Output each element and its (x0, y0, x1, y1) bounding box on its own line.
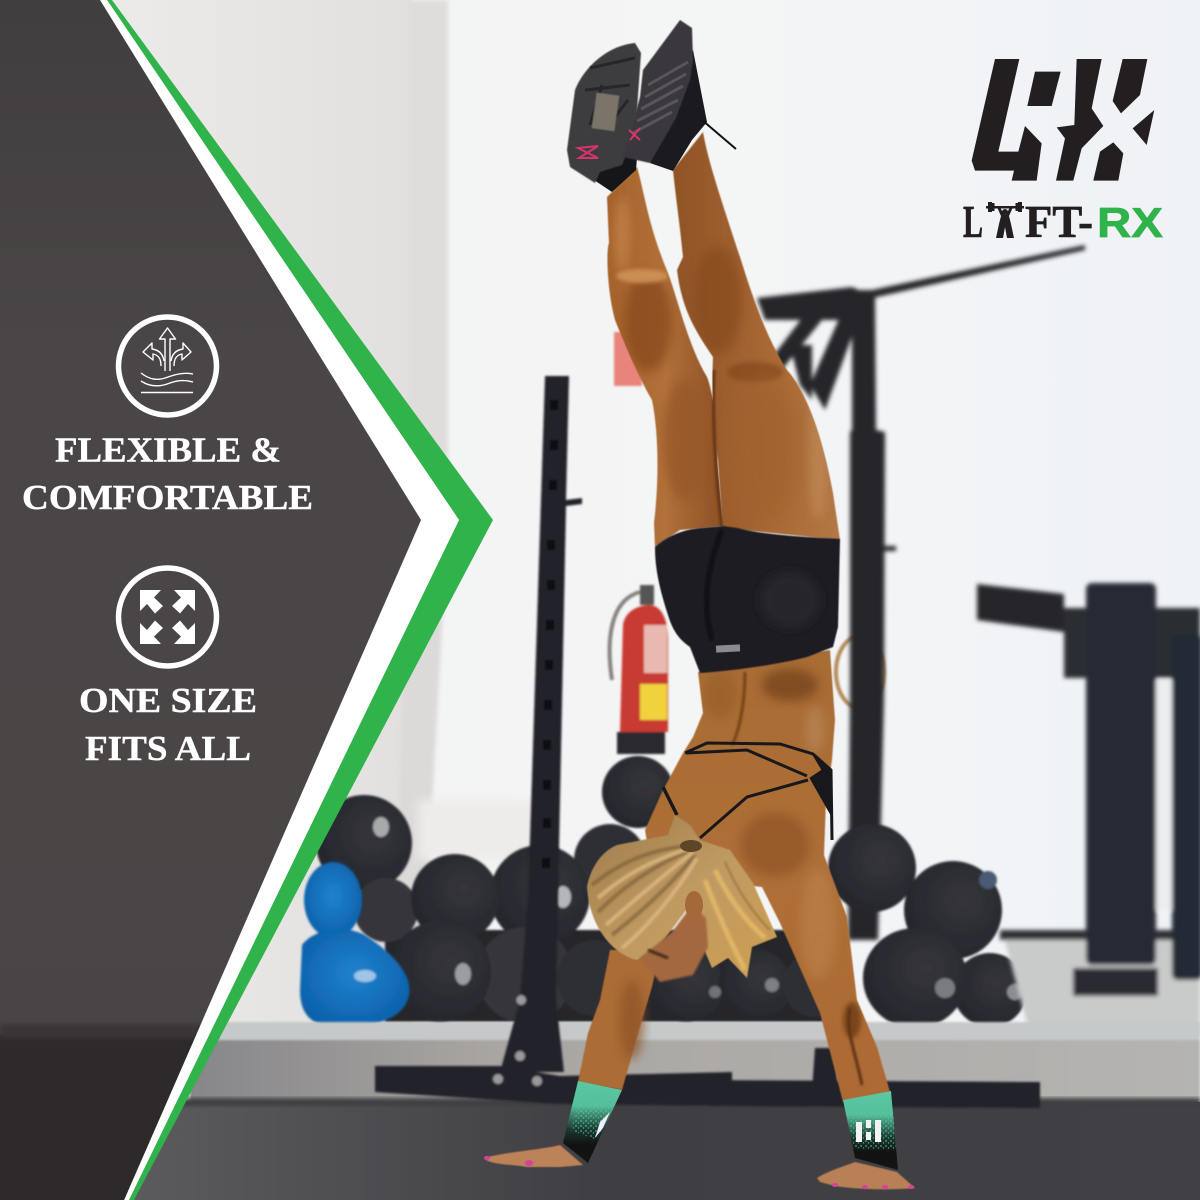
icon: one size expand arrows (118, 568, 216, 666)
left leg (607, 167, 723, 547)
text: one size fits all (79, 681, 257, 768)
left hand (484, 1145, 583, 1167)
text: one size fits all: FITS ALL (85, 729, 251, 768)
medicine balls right (828, 824, 1027, 1028)
red wall sign (614, 332, 642, 386)
front rack post with base (375, 376, 1040, 1108)
sports bra straps (663, 743, 832, 840)
shoelace (702, 120, 736, 149)
hair (587, 815, 777, 978)
leg muscle shading (614, 197, 828, 528)
text: flexible and comfortable: FLEXIBLE & (55, 430, 281, 470)
logo wordmark LIFT-RX: L (963, 196, 983, 247)
shorts (655, 526, 840, 673)
text: flexible and comfortable (22, 430, 313, 517)
icon: flexible arrows (118, 317, 216, 415)
logo wordmark LIFT-RX: RX (1097, 199, 1163, 246)
logo mark (972, 59, 1154, 181)
right shoe (623, 20, 707, 171)
medicine balls left and centre (316, 756, 847, 1023)
panel: dark chevron (0, 0, 493, 1200)
right wristband (843, 1091, 898, 1170)
left shoe sole (567, 43, 641, 192)
floor (120, 1098, 1200, 1200)
left arm (578, 950, 660, 1090)
text: flexible and comfortable: COMFORTABLE (22, 478, 313, 517)
athlete doing a handstand (484, 20, 915, 1189)
right hand (817, 1162, 915, 1189)
extinguisher (610, 585, 668, 754)
gymnastic ring (836, 636, 884, 708)
logo wordmark LIFT-RX (963, 196, 1163, 247)
logo wordmark LIFT-RX: FT- (1025, 196, 1093, 247)
back squat rack (757, 245, 1085, 940)
left wristband (563, 1081, 622, 1163)
face (640, 891, 708, 982)
torso and right arm (645, 650, 890, 1102)
bench and pads (977, 583, 1200, 1035)
icon: weightlifter (986, 202, 1024, 238)
ledge (190, 1022, 1200, 1106)
text: one size fits all: ONE SIZE (79, 681, 257, 720)
right leg (673, 132, 840, 540)
torso shading (704, 669, 862, 1085)
blue exercise balls (300, 862, 409, 1028)
